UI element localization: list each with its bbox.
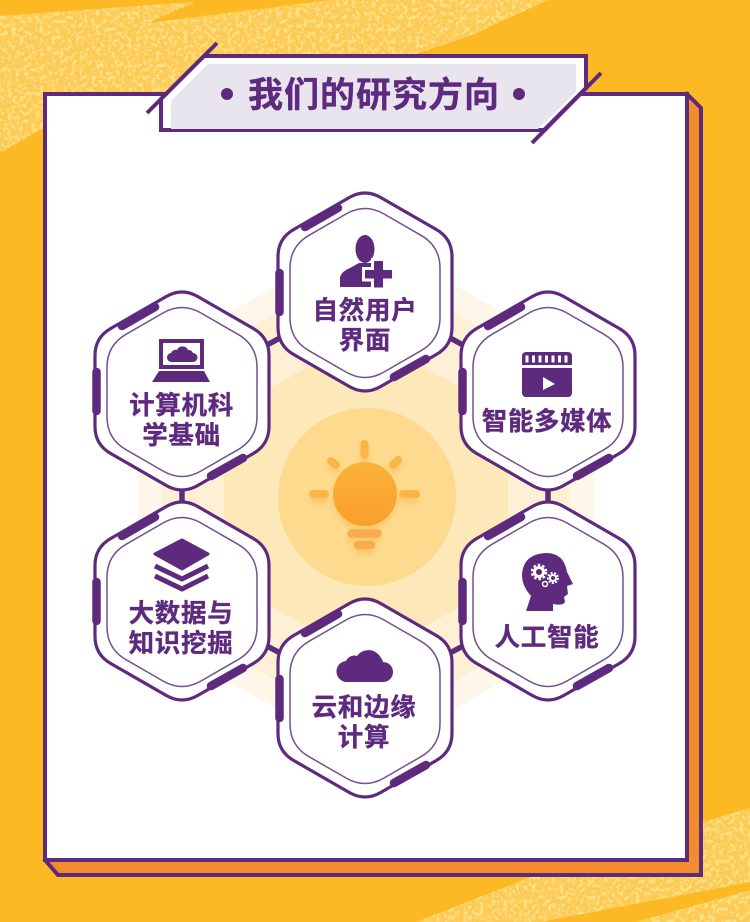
connector lines: [182, 292, 548, 698]
bulb: [333, 462, 397, 526]
title: 我们的研究方向: [248, 76, 500, 115]
hexagon: big data and knowledge mining: [95, 502, 269, 700]
label line 2: 学基础: [142, 422, 221, 450]
title banner: [147, 43, 601, 143]
frame: [95, 292, 269, 490]
glow hexagon middle: [162, 261, 570, 733]
icon: cloud: [336, 650, 393, 682]
hexagon: cloud and edge computing: [278, 599, 452, 797]
hexagon: computer science foundations: [95, 292, 269, 490]
frame: [278, 599, 452, 797]
banner fill: [171, 64, 576, 129]
title dot right: [513, 88, 525, 100]
glow circle: [278, 408, 456, 586]
main white panel: [45, 94, 687, 860]
textured brush stroke: bottom right corner: [636, 890, 750, 922]
hexagon: intelligent multimedia: [461, 292, 635, 490]
label line 2: 界面: [339, 327, 391, 355]
glow hexagon inner: [224, 338, 508, 656]
icon: video clip: [522, 352, 572, 397]
central glow: [138, 234, 594, 760]
banner slash left: [147, 43, 217, 113]
label: 智能多媒体: [482, 408, 612, 436]
hexagon: artificial intelligence: [461, 502, 635, 700]
frame: [461, 292, 635, 490]
textured brush stroke: top left: [0, 0, 548, 153]
title dot left: [221, 88, 233, 100]
hexagon: natural user interface: [278, 193, 452, 391]
icon: layered stack: [155, 540, 208, 589]
frame: [95, 502, 269, 700]
bulb rays: [313, 444, 416, 494]
label: 云和边缘: [312, 694, 416, 722]
label: 大数据与: [129, 600, 233, 628]
banner frame: [161, 56, 586, 130]
icon: laptop with cloud: [152, 341, 210, 382]
banner slash right: [532, 73, 601, 143]
icon: person with plus: [340, 235, 392, 288]
frame: [278, 193, 452, 391]
icon: light bulb: [313, 444, 416, 545]
label line 2: 计算: [338, 724, 390, 752]
frame: [461, 502, 635, 700]
icon: head with gears: [522, 553, 573, 611]
bulb base: [352, 534, 378, 545]
panel shadow: [45, 94, 701, 875]
label: 计算机科: [129, 392, 234, 420]
label: 人工智能: [495, 624, 599, 652]
label: 自然用户: [313, 297, 417, 325]
label line 2: 知识挖掘: [129, 630, 233, 658]
textured brush stroke: bottom right: [416, 808, 750, 922]
glow hexagon outer: [138, 234, 594, 760]
